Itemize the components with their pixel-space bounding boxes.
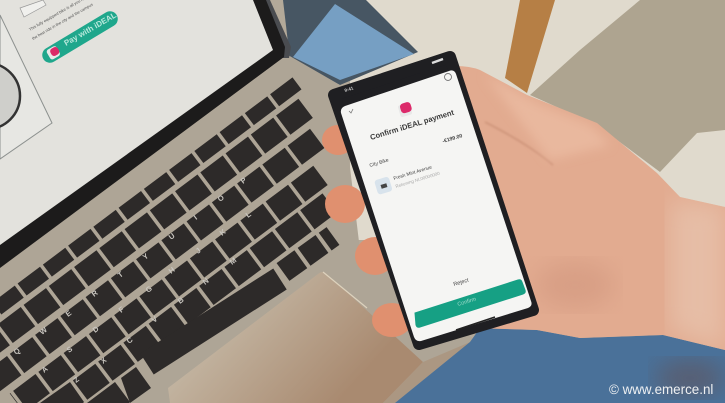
- key legends: C: [125, 335, 135, 346]
- status bar icons: [432, 59, 443, 63]
- ZXCV row: [80, 203, 330, 390]
- key legends: [12, 175, 253, 385]
- key legends: B: [176, 295, 186, 306]
- key legends: U: [167, 231, 177, 242]
- left fingers: [322, 125, 412, 337]
- QWERTY row: [0, 138, 317, 382]
- laptop screen: [0, 0, 273, 245]
- key legends: T: [116, 269, 125, 280]
- key legends: K: [218, 227, 228, 238]
- pay with iDEAL button: [46, 11, 118, 60]
- carpet background: [350, 0, 725, 240]
- phone: [334, 57, 533, 344]
- key legends: D: [91, 324, 101, 335]
- hand finger highlight: [500, 87, 602, 157]
- function key row: [0, 83, 297, 327]
- key legends: V: [150, 314, 159, 325]
- key legends: L: [244, 209, 253, 220]
- phone screen: [341, 70, 532, 341]
- key legends: X: [99, 355, 108, 366]
- dark rug: [530, 0, 725, 172]
- reject link: Reject: [453, 277, 470, 288]
- key legends: E: [64, 308, 73, 319]
- key legends: P: [239, 175, 248, 186]
- merchant name: City Bike: [369, 157, 390, 169]
- status bar time: 9:41: [344, 85, 354, 93]
- thumb fold: [485, 122, 553, 165]
- home indicator: [456, 317, 495, 330]
- key legends: Z: [72, 374, 81, 385]
- key legends: M: [228, 256, 238, 267]
- jeans upper: [283, 0, 418, 85]
- account detail: Rekening NL00000000: [395, 171, 441, 189]
- laptop body: [0, 55, 475, 403]
- palm shadow: [546, 266, 604, 302]
- key legends: R: [90, 288, 100, 299]
- amount: -€199.00: [442, 133, 463, 145]
- key legends: Y: [141, 251, 150, 262]
- jeans lower: [395, 328, 725, 403]
- key legends: H: [167, 265, 177, 276]
- laptop hinge edge: [263, 0, 291, 58]
- laptop bezel: [0, 0, 285, 268]
- key legends: S: [65, 344, 74, 355]
- pay with iDEAL button: Pay with iDEAL: [62, 11, 118, 48]
- hand: [459, 66, 725, 350]
- number key row: [0, 108, 306, 352]
- iDEAL logo: [397, 101, 413, 117]
- space bar: [147, 279, 280, 364]
- confirm button: Confirm: [457, 296, 477, 308]
- key legends: W: [38, 325, 50, 337]
- wooden chair leg: [505, 0, 555, 93]
- keyboard: [0, 83, 333, 403]
- paper card with bicycle wheel: [0, 15, 52, 159]
- command keys right: [283, 236, 333, 272]
- back chevron: [349, 109, 353, 113]
- quantity selector: [20, 0, 46, 17]
- ASDF row: [17, 175, 321, 403]
- laptop small text line 2: the best ride in the city and the campus: [31, 2, 94, 41]
- key legends: A: [40, 364, 50, 375]
- key legends: I: [192, 213, 199, 222]
- account name: Fresh Mint Avenue: [393, 164, 433, 182]
- merchant icon: [374, 176, 393, 195]
- phone body: [334, 57, 533, 344]
- confirm button: [415, 280, 525, 327]
- key legends: Q: [12, 346, 22, 357]
- confirm heading: Confirm iDEAL payment: [369, 108, 455, 142]
- laptop body lower right: [383, 340, 475, 403]
- trackpad: [168, 272, 423, 403]
- key legends: G: [144, 284, 154, 295]
- left shift key: [40, 382, 84, 403]
- wrist highlight: [670, 200, 725, 350]
- key legends: O: [216, 193, 226, 204]
- watermark: © www.emerce.nl: [609, 382, 713, 397]
- key legends: J: [194, 246, 203, 256]
- key legends: F: [117, 304, 126, 315]
- command key left lower: [121, 367, 151, 403]
- key legends: N: [201, 276, 211, 287]
- help icon: [444, 74, 452, 80]
- trackpad highlight edge: [323, 272, 367, 308]
- command key left: [87, 382, 130, 403]
